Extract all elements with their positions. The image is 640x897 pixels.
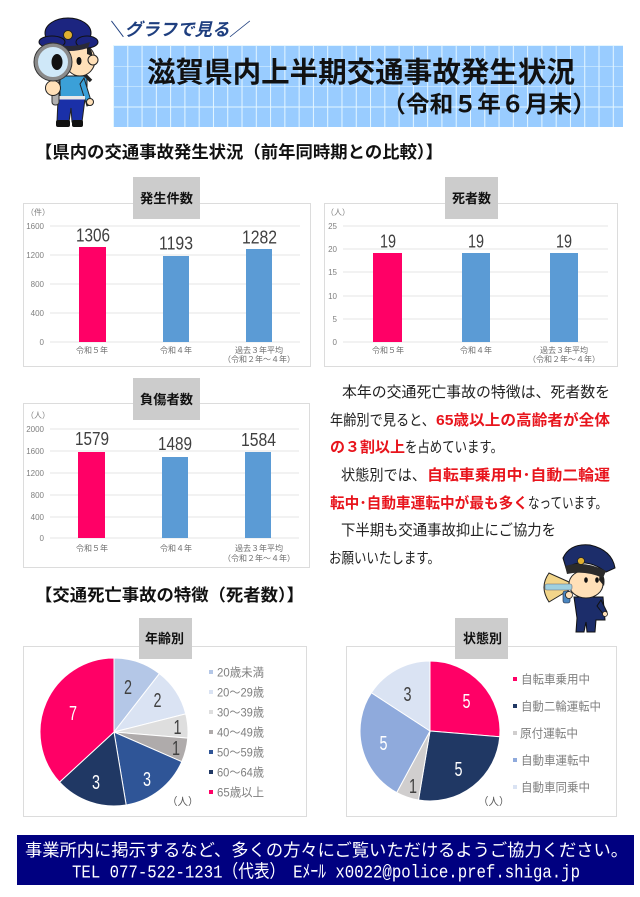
- panel: age pie chart: 20歳未満: [217, 666, 264, 680]
- panel: age pie chart: 3: [92, 772, 100, 794]
- panel: age pie chart: 2: [154, 690, 162, 712]
- panel: age pie chart: 20～29歳: [217, 686, 264, 700]
- text block: summary: 状態別では、: [341, 467, 426, 484]
- text block: summary: 転中･自動車運転中が最も多く: [330, 494, 528, 512]
- text block: summary: 65歳以上の高齢者が全体: [436, 411, 610, 429]
- panel: status pie chart: 1: [409, 776, 417, 798]
- heading: fatal accident characteristics: 【交通死亡事故の特徴（死者数）】: [35, 586, 304, 605]
- panel: fatalities bar chart: [324, 177, 618, 366]
- text block: summary: [329, 384, 610, 567]
- panel: fatalities bar chart: 5: [333, 315, 338, 324]
- panel: injuries bar chart: 令和５年: [76, 543, 108, 553]
- panel: age pie chart: 1: [174, 717, 182, 739]
- panel: fatalities bar chart: 25: [328, 222, 338, 231]
- text block: summary: を占めています。: [405, 439, 503, 456]
- panel: injuries bar chart: 800: [31, 491, 45, 500]
- panel: fatalities bar chart: 0: [333, 338, 338, 347]
- panel: accidents bar chart: 過去３年平均: [235, 345, 283, 355]
- text block: summary: 自転車乗用中･自動二輪運: [427, 466, 610, 484]
- panel: injuries bar chart: 令和４年: [160, 543, 192, 553]
- panel: accidents bar chart: 1600: [26, 222, 45, 231]
- panel: injuries bar chart: 400: [31, 513, 45, 522]
- panel: fatalities bar chart: 過去３年平均: [540, 345, 588, 355]
- panel: accidents bar chart: 400: [31, 309, 45, 318]
- panel: status pie chart: 5: [454, 759, 462, 781]
- panel: injuries bar chart: （人）: [26, 411, 50, 420]
- panel: age pie chart: 年齢別: [145, 631, 184, 646]
- panel: fatalities bar chart: 死者数: [452, 191, 491, 206]
- panel: status pie chart: 自動二輪運転中: [521, 698, 601, 714]
- panel: status pie chart: 5: [380, 733, 388, 755]
- panel: injuries bar chart: 0: [40, 534, 45, 543]
- panel: accidents bar chart: （令和２年～４年）: [223, 354, 295, 364]
- text block: summary: 下半期も交通事故抑止にご協力を: [341, 522, 556, 539]
- panel: accidents bar chart: 1306: [76, 226, 110, 246]
- panel: status pie chart: [346, 618, 616, 816]
- panel: age pie chart: 65歳以上: [217, 786, 264, 800]
- panel: status pie chart: 状態別: [463, 631, 502, 646]
- panel: age pie chart: （人）: [167, 796, 198, 808]
- panel: injuries bar chart: 過去３年平均: [235, 543, 283, 553]
- panel: fatalities bar chart: 10: [328, 292, 338, 301]
- title date: （令和５年６月末）: [382, 91, 596, 117]
- panel: fatalities bar chart: （人）: [326, 208, 350, 217]
- panel: status pie chart: 自転車乗用中: [521, 672, 590, 686]
- subtitle: graph view: ＼グラフで見る／: [107, 20, 250, 40]
- panel: age pie chart: 1: [172, 738, 180, 760]
- panel: fatalities bar chart: 15: [328, 268, 338, 277]
- panel: fatalities bar chart: 19: [380, 232, 396, 252]
- panel: fatalities bar chart: 20: [328, 245, 338, 254]
- panel: status pie chart: 3: [404, 684, 412, 706]
- panel: injuries bar chart: 1579: [75, 429, 109, 449]
- panel: injuries bar chart: 1584: [241, 430, 276, 450]
- heading: comparison section: 【県内の交通事故発生状況（前年同時期との比較）】: [35, 142, 443, 162]
- icon: police officer with magnifying glass: [34, 18, 98, 127]
- panel: injuries bar chart: 2000: [26, 425, 45, 434]
- panel: status pie chart: 自動車同乗中: [521, 780, 590, 794]
- panel: fatalities bar chart: 令和４年: [460, 345, 492, 355]
- panel: fatalities bar chart: 19: [468, 232, 484, 252]
- panel: injuries bar chart: 1489: [158, 434, 192, 454]
- panel: injuries bar chart: 負傷者数: [140, 392, 193, 407]
- panel: injuries bar chart: （令和２年～４年）: [223, 553, 295, 563]
- panel: status pie chart: （人）: [478, 796, 510, 808]
- panel: accidents bar chart: [24, 177, 310, 366]
- panel: accidents bar chart: 0: [40, 338, 45, 347]
- panel: age pie chart: 40～49歳: [217, 726, 264, 740]
- panel: age pie chart: 2: [124, 677, 132, 699]
- panel: status pie chart: 5: [462, 691, 470, 713]
- panel: accidents bar chart: 令和５年: [76, 345, 108, 355]
- title: 滋賀県内上半期交通事故発生状況: [147, 57, 575, 89]
- footer message: 事業所内に掲示するなど、多くの方々にご覧いただけるようご協力ください。: [25, 841, 628, 860]
- panel: age pie chart: 30～39歳: [217, 706, 264, 720]
- text block: summary: お願いいたします。: [329, 550, 440, 567]
- text block: summary: 本年の交通死亡事故の特徴は、死者数を: [342, 384, 610, 401]
- panel: age pie chart: 7: [69, 703, 77, 725]
- panel: fatalities bar chart: （令和２年～４年）: [528, 354, 600, 364]
- panel: accidents bar chart: 800: [31, 280, 45, 289]
- panel: fatalities bar chart: 19: [556, 232, 572, 252]
- panel: injuries bar chart: 1600: [26, 447, 45, 456]
- footer banner: [17, 835, 634, 885]
- icon: police officer with megaphone: [544, 545, 615, 632]
- text block: summary: なっています。: [528, 495, 607, 512]
- panel: accidents bar chart: 発生件数: [140, 191, 193, 206]
- panel: age pie chart: [24, 618, 306, 816]
- panel: status pie chart: 自動車運転中: [521, 752, 590, 768]
- panel: injuries bar chart: [24, 378, 310, 568]
- panel: accidents bar chart: 1200: [26, 251, 45, 260]
- panel: age pie chart: 3: [143, 769, 151, 791]
- panel: accidents bar chart: 令和４年: [160, 345, 192, 355]
- panel: age pie chart: 50～59歳: [217, 746, 264, 760]
- footer contact: TEL 077-522-1231（代表） Eﾒｰﾙ x0022@police.pref.shiga.jp: [72, 862, 580, 884]
- panel: accidents bar chart: 1193: [159, 234, 193, 254]
- panel: status pie chart: 原付運転中: [520, 726, 578, 740]
- text block: summary: 年齢別で見ると、: [330, 412, 435, 429]
- panel: age pie chart: 60～64歳: [217, 766, 264, 780]
- title banner: [113, 45, 623, 127]
- panel: accidents bar chart: 1282: [242, 228, 277, 248]
- panel: fatalities bar chart: 令和５年: [372, 345, 404, 355]
- text block: summary: の３割以上: [330, 439, 405, 456]
- panel: injuries bar chart: 1200: [26, 469, 45, 478]
- panel: accidents bar chart: （件）: [26, 207, 50, 217]
